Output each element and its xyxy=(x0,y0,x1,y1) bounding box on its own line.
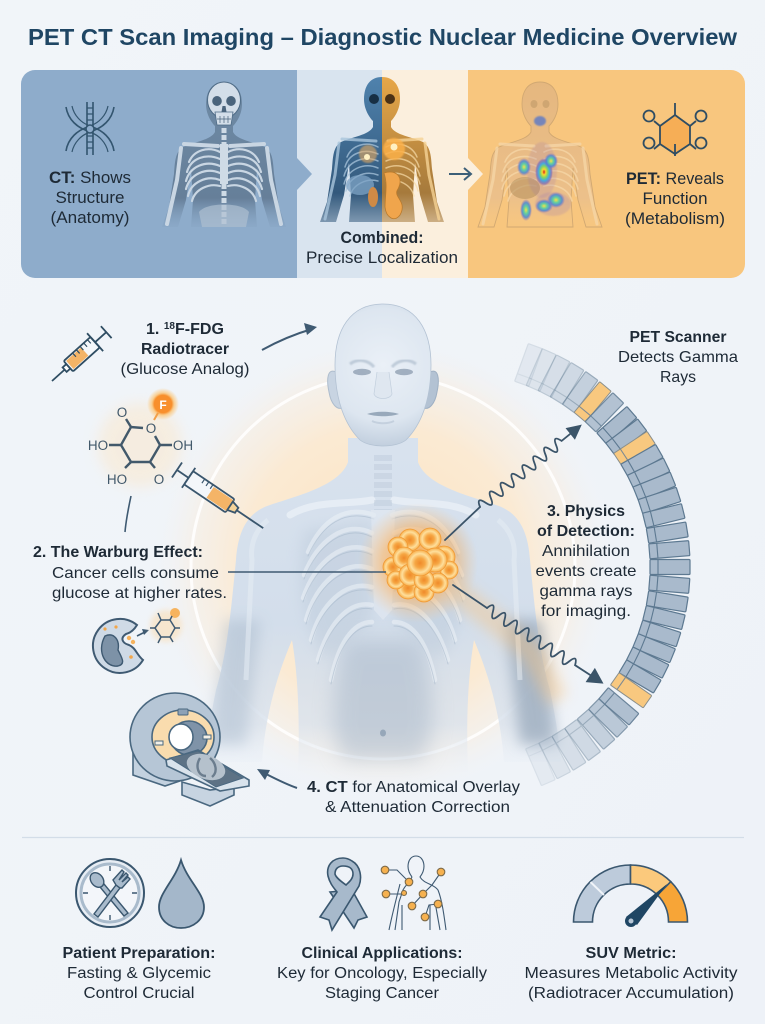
text: patient preparation xyxy=(62,945,216,1002)
connector: molecule to Warburg xyxy=(125,496,131,532)
detector arc xyxy=(515,344,690,786)
text: step 1 radiotracer: (Glucose Analog) xyxy=(120,361,250,378)
text: step 4 CT overlay: & Attenuation Correction xyxy=(325,799,510,816)
text: CT label: Structure xyxy=(56,189,124,207)
icon: cancer ribbon xyxy=(320,858,367,930)
text: step 2 Warburg effect: 2. The Warburg Effect: xyxy=(33,544,203,561)
text: step 3 physics: of Detection: xyxy=(537,523,635,540)
icon: molecule xyxy=(644,103,706,156)
text: SUV metric: (Radiotracer Accumulation) xyxy=(528,985,734,1002)
icon: glucose molecule: O xyxy=(154,472,164,487)
text: step 3 physics: 3. Physics xyxy=(547,503,625,520)
icon: syringe small xyxy=(44,323,114,390)
text: combined label xyxy=(306,229,458,267)
text: step 3 physics: events create xyxy=(536,563,637,580)
text: PET label: (Metabolism) xyxy=(625,210,725,228)
text: CT label: (Anatomy) xyxy=(50,209,130,227)
text: step 1 radiotracer xyxy=(120,321,250,378)
icon: glucose molecule: OH xyxy=(173,438,193,453)
text: CT label xyxy=(49,169,131,227)
arrow: tracer to body xyxy=(262,323,317,350)
text: clinical applications: Clinical Applications: xyxy=(302,945,462,962)
combined body figure xyxy=(320,77,444,222)
text: step 1 radiotracer: 1. xyxy=(146,321,159,338)
Warburg connector line xyxy=(228,571,386,573)
icon: SUV gauge xyxy=(574,865,688,927)
text: PET label: Function xyxy=(642,190,708,208)
text: SUV metric: SUV Metric: xyxy=(586,945,676,962)
text: step 2 Warburg effect: Cancer cells consume xyxy=(52,565,219,582)
text: CT label: CT: Shows xyxy=(49,169,131,187)
text: combined label: Combined: xyxy=(340,229,424,247)
text: PET scanner xyxy=(618,329,738,386)
CT skeleton figure xyxy=(162,82,286,227)
icon: fasting clock xyxy=(76,859,144,927)
text: step 1 radiotracer: 18 xyxy=(164,321,175,332)
text: PET label: PET: Reveals xyxy=(626,170,724,188)
text: PET label xyxy=(625,170,725,228)
icon: syringe injecting xyxy=(170,460,270,538)
text: PET scanner: PET Scanner xyxy=(630,329,726,346)
human figure xyxy=(205,304,561,772)
PET body figure xyxy=(478,82,602,227)
neck vertebrae xyxy=(374,455,392,510)
gamma ray arrow: lower xyxy=(453,585,606,688)
ribs xyxy=(246,500,520,684)
gamma ray arrow: upper xyxy=(445,421,584,540)
text: PET scanner: Rays xyxy=(660,369,696,386)
icon: glucose molecule: HO xyxy=(107,472,127,487)
arrow: combined to PET xyxy=(449,168,471,180)
face xyxy=(350,360,416,423)
icon: glucose molecule xyxy=(88,388,193,487)
text: SUV metric: Measures Metabolic Activity xyxy=(524,965,738,982)
text: step 1 radiotracer: Radiotracer xyxy=(141,341,229,358)
PET heat spots xyxy=(517,116,565,221)
icon: glucose molecule: HO xyxy=(88,438,108,453)
icon: CT scanner xyxy=(130,693,249,806)
icon: glucose molecule: O xyxy=(146,421,156,436)
text: step 2 Warburg effect: glucose at higher rates. xyxy=(52,585,227,602)
text: PET scanner: Detects Gamma xyxy=(618,349,738,366)
text: SUV metric xyxy=(524,945,738,1002)
head xyxy=(335,304,431,446)
text: clinical applications: Key for Oncology, Especially xyxy=(277,965,487,982)
central radial glow and ring xyxy=(148,332,618,802)
text: clinical applications xyxy=(277,945,487,1002)
text: step 4 CT overlay: 4. CT for Anatomical Overlay xyxy=(307,779,520,796)
text: step 3 physics xyxy=(536,503,637,620)
text: step 3 physics: for imaging. xyxy=(541,603,631,620)
panel: CT PET comparison xyxy=(21,70,745,278)
text: step 2 Warburg effect xyxy=(33,544,227,602)
text: clinical applications: Staging Cancer xyxy=(325,985,439,1002)
icon: glucose molecule: F xyxy=(159,398,167,412)
text: step 1 radiotracer: F-FDG xyxy=(175,321,224,338)
text: step 4 CT overlay xyxy=(307,779,520,816)
tumor cluster xyxy=(358,503,558,700)
text: step 3 physics: gamma rays xyxy=(540,583,632,600)
text: patient preparation: Fasting & Glycemic xyxy=(67,965,211,982)
icon: body with metastases xyxy=(381,856,446,930)
ears xyxy=(328,371,342,408)
title: PET CT Scan Imaging – Diagnostic Nuclear Medicine Overview xyxy=(28,24,738,50)
text: combined label: Precise Localization xyxy=(306,249,458,267)
text: patient preparation: Control Crucial xyxy=(84,985,194,1002)
icon: water drop xyxy=(159,860,204,928)
text: step 3 physics: Annihilation xyxy=(542,543,630,560)
arrow: CT callout xyxy=(257,769,297,788)
icon: glucose molecule: O xyxy=(117,405,127,420)
icon: spine and ribs xyxy=(66,102,114,155)
icon: cancer cell uptake xyxy=(93,608,182,673)
text: patient preparation: Patient Preparation: xyxy=(62,945,216,962)
